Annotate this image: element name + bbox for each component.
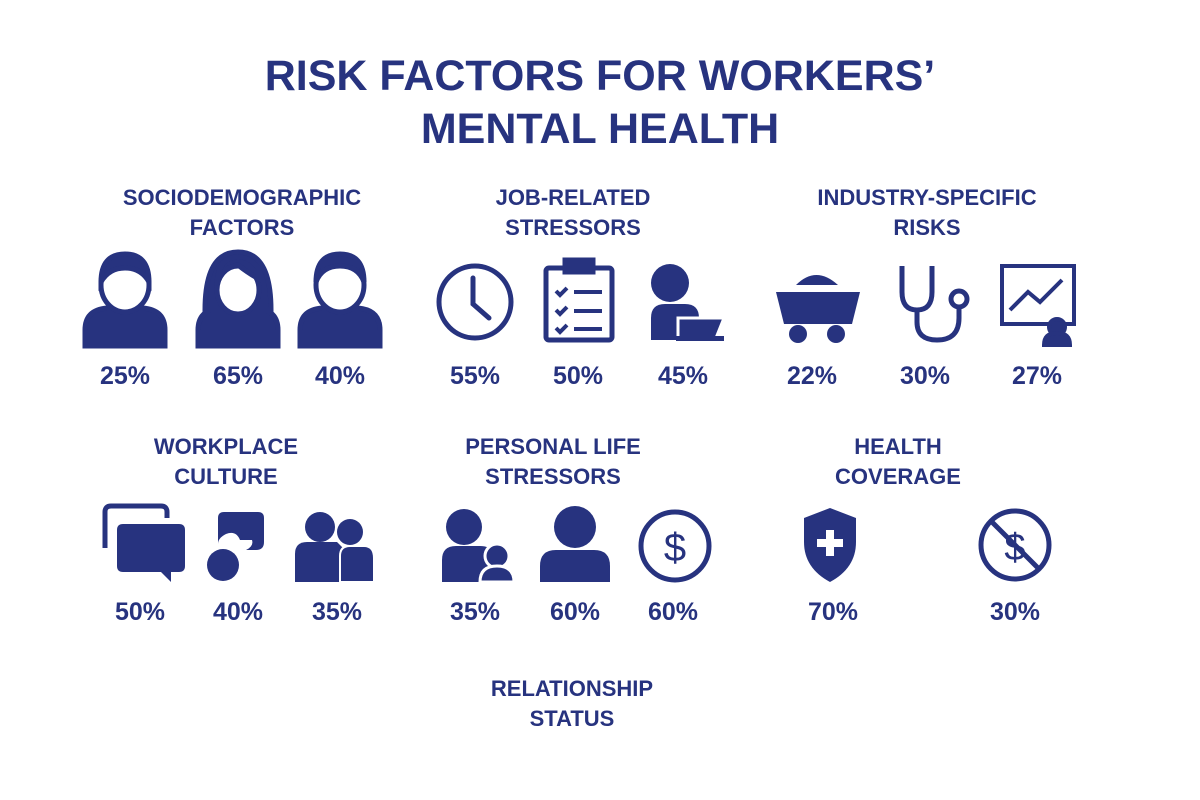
- percentages row 2: [115, 598, 1040, 626]
- icon: person at laptop: [651, 264, 724, 341]
- percentages row 1: 22%: [787, 362, 837, 390]
- percentages row 1: [100, 362, 1062, 390]
- icon: man: [85, 254, 165, 346]
- heading: workplace culture: WORKPLACE: [154, 434, 298, 459]
- heading: health coverage: HEALTH: [854, 434, 942, 459]
- heading: health coverage: [835, 434, 961, 489]
- icon: checklist: [546, 260, 612, 340]
- heading: job-related stressors: JOB-RELATED: [496, 185, 650, 210]
- heading: personal life stressors: [465, 434, 641, 489]
- percentages row 2: 35%: [312, 598, 362, 626]
- heading: workplace culture: [154, 434, 298, 489]
- icon: speech bubbles: [105, 506, 185, 582]
- icon: dollar circle: $: [664, 526, 686, 570]
- icon: monitor chart: [1002, 266, 1074, 345]
- icon: person: [540, 506, 610, 582]
- heading: health coverage: COVERAGE: [835, 464, 961, 489]
- percentages row 1: 30%: [900, 362, 950, 390]
- heading: industry-specific risks: INDUSTRY-SPECIFIC: [817, 185, 1037, 210]
- heading: relationship status: RELATIONSHIP: [491, 676, 653, 701]
- icon: no money: $: [1004, 527, 1026, 569]
- percentages row 2: 30%: [990, 598, 1040, 626]
- heading: sociodemographic factors: [123, 185, 361, 240]
- percentages row 1: 55%: [450, 362, 500, 390]
- percentages row 2: 50%: [115, 598, 165, 626]
- title: MENTAL HEALTH: [421, 105, 779, 153]
- percentages row 2: 70%: [808, 598, 858, 626]
- percentages row 1: 25%: [100, 362, 150, 390]
- percentages row 1: 45%: [658, 362, 708, 390]
- percentages row 2: 40%: [213, 598, 263, 626]
- title: [265, 52, 935, 153]
- heading: relationship status: STATUS: [530, 706, 614, 731]
- heading: industry-specific risks: [817, 185, 1037, 240]
- icon: no money: [981, 511, 1049, 579]
- title: RISK FACTORS FOR WORKERS’: [265, 52, 935, 100]
- heading: industry-specific risks: RISKS: [893, 215, 961, 240]
- icon: person: [300, 254, 380, 346]
- heading: workplace culture: CULTURE: [174, 464, 278, 489]
- percentages row 2: 60%: [648, 598, 698, 626]
- icon: dollar circle: [641, 512, 709, 580]
- icon: two people: [295, 512, 374, 582]
- icon: clock: [439, 266, 511, 338]
- heading: job-related stressors: STRESSORS: [505, 215, 641, 240]
- icon: mine cart: [776, 275, 860, 343]
- heading: job-related stressors: [496, 185, 650, 240]
- heading: personal life stressors: STRESSORS: [485, 464, 621, 489]
- percentages row 1: 65%: [213, 362, 263, 390]
- icon: shield with cross: [804, 508, 856, 582]
- heading: sociodemographic factors: FACTORS: [190, 215, 294, 240]
- percentages row 2: 60%: [550, 598, 600, 626]
- percentages row 1: 27%: [1012, 362, 1062, 390]
- heading: relationship status: [491, 676, 653, 731]
- icon: person with speech: [207, 512, 264, 581]
- icon: woman: [198, 252, 278, 346]
- percentages row 1: 50%: [553, 362, 603, 390]
- icon: stethoscope: [902, 266, 967, 340]
- percentages row 1: 40%: [315, 362, 365, 390]
- heading: sociodemographic factors: SOCIODEMOGRAPHIC: [123, 185, 361, 210]
- icon: parent and child: [442, 509, 514, 582]
- heading: personal life stressors: PERSONAL LIFE: [465, 434, 641, 459]
- percentages row 2: 35%: [450, 598, 500, 626]
